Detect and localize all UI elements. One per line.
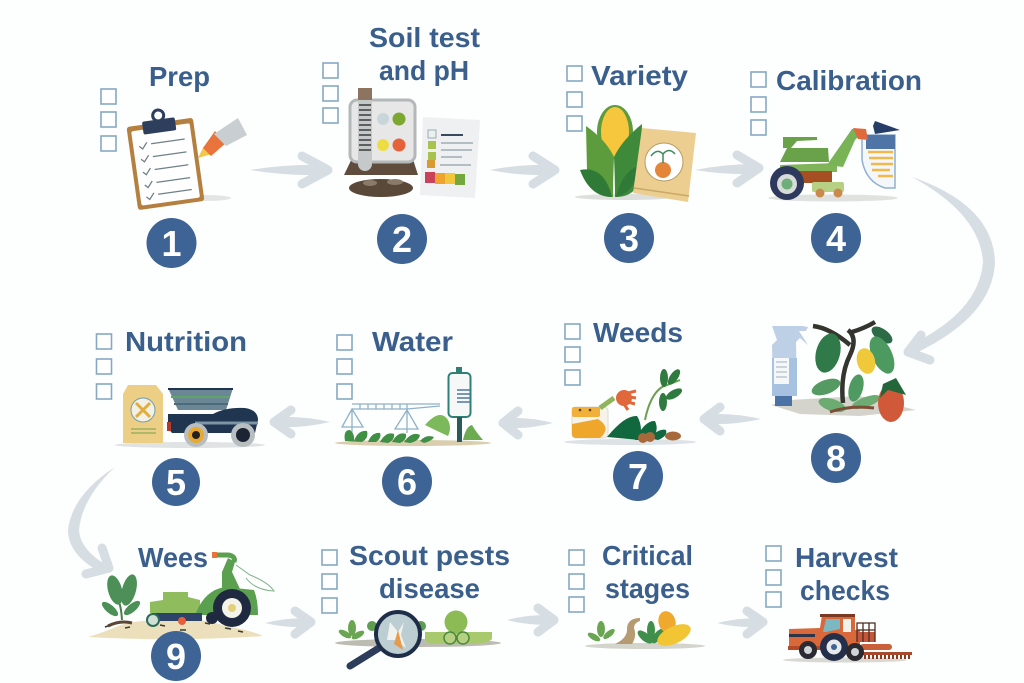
heading: Water: Water — [372, 326, 453, 357]
step 5: Nutrition — [96, 326, 265, 506]
heading: Scout pests disease: disease — [379, 573, 480, 604]
icon: clipboard and pencil — [125, 105, 247, 210]
step 3: Variety — [567, 60, 696, 263]
heading: Weeds: Weeds — [593, 317, 683, 348]
number badge 8 — [811, 433, 861, 483]
heading: Harvest checks — [795, 542, 898, 606]
step: Harvest checks — [766, 542, 912, 662]
curved arrow 5 to 9 — [68, 467, 115, 574]
number badge 1: 1 — [161, 223, 182, 264]
icon: fertilizer bag and spreader — [115, 385, 265, 448]
icon: growth stages — [585, 609, 705, 650]
step 2: Soil test and pH — [323, 22, 480, 264]
number badge 3: 3 — [619, 218, 639, 259]
step 9: Wees — [88, 542, 274, 681]
heading: Critical stages: Critical — [602, 540, 693, 571]
checkboxes — [322, 550, 337, 613]
number badge 9: 9 — [166, 636, 186, 677]
arrow 3 to 4 — [695, 155, 759, 183]
checkboxes — [323, 63, 338, 123]
number badge 5 — [152, 458, 200, 506]
icon: seedling and tractor sprayer — [88, 552, 274, 639]
heading: Variety: Variety — [591, 60, 688, 91]
arrow 8 to 7 — [704, 407, 761, 431]
number badge 3 — [604, 213, 654, 263]
number badge 6: 6 — [397, 462, 417, 502]
heading: Soil test and pH: Soil test — [369, 22, 480, 53]
arrow scout to critical — [507, 608, 554, 632]
arrow 7 to 6 — [503, 411, 553, 435]
checkboxes — [337, 335, 352, 399]
step 1: Prep — [101, 61, 247, 268]
checkboxes — [101, 89, 116, 151]
heading: Critical stages: stages — [605, 573, 690, 604]
checkboxes — [567, 66, 582, 131]
heading: Critical stages — [602, 540, 693, 604]
checkboxes — [96, 334, 112, 399]
number badge 1 — [146, 218, 196, 268]
curved arrow 4 to 8 — [908, 177, 995, 360]
heading: Soil test and pH — [369, 22, 480, 86]
number badge 5: 5 — [166, 462, 186, 503]
heading: Soil test and pH: and pH — [379, 55, 469, 86]
number badge 4: 4 — [826, 218, 846, 259]
arrow 9 to scout — [265, 611, 311, 634]
step 8: plant health — [771, 322, 916, 483]
icon: pivot irrigation — [335, 367, 491, 446]
icon: harvester tractor — [783, 614, 912, 662]
checkboxes — [766, 546, 781, 607]
icon: spray bottle and fruiting plant — [771, 322, 916, 422]
number badge 9 — [151, 631, 201, 681]
number badge 2 — [377, 214, 427, 264]
heading: Scout pests disease: Scout pests — [349, 540, 510, 571]
checkboxes — [565, 324, 580, 385]
arrow critical to harvest — [717, 611, 763, 634]
number badge 6 — [382, 456, 432, 506]
heading: Nutrition: Nutrition — [125, 326, 247, 357]
heading: Harvest checks: Harvest — [795, 542, 898, 573]
step 4: Calibration — [751, 65, 922, 263]
icon: corn and seed bag — [575, 105, 696, 202]
heading: Scout pests disease — [349, 540, 510, 604]
checkboxes — [751, 72, 766, 135]
arrow 2 to 3 — [490, 156, 555, 184]
number badge 4 — [811, 213, 861, 263]
number badge 2: 2 — [392, 219, 412, 260]
heading: Wees: Wees — [138, 542, 208, 573]
heading: Calibration: Calibration — [776, 65, 922, 96]
arrow 1 to 2 — [250, 156, 328, 184]
checkboxes — [569, 550, 584, 612]
step 7: Weeds — [564, 317, 696, 501]
icon: soil tester — [344, 88, 480, 198]
arrow 6 to 5 — [274, 410, 330, 434]
icon: magnifier and plants — [335, 610, 501, 666]
step 6: Water — [335, 326, 491, 506]
heading: Harvest checks: checks — [800, 575, 890, 606]
number badge 7 — [613, 451, 663, 501]
step: Scout pests disease — [322, 540, 510, 666]
heading: Prep: Prep — [149, 61, 210, 92]
icon: calibrated spreader — [768, 121, 900, 202]
number badge 8: 8 — [826, 438, 846, 479]
icon: weed control — [564, 367, 696, 445]
number badge 7: 7 — [628, 456, 648, 497]
step: Critical stages — [569, 540, 705, 650]
